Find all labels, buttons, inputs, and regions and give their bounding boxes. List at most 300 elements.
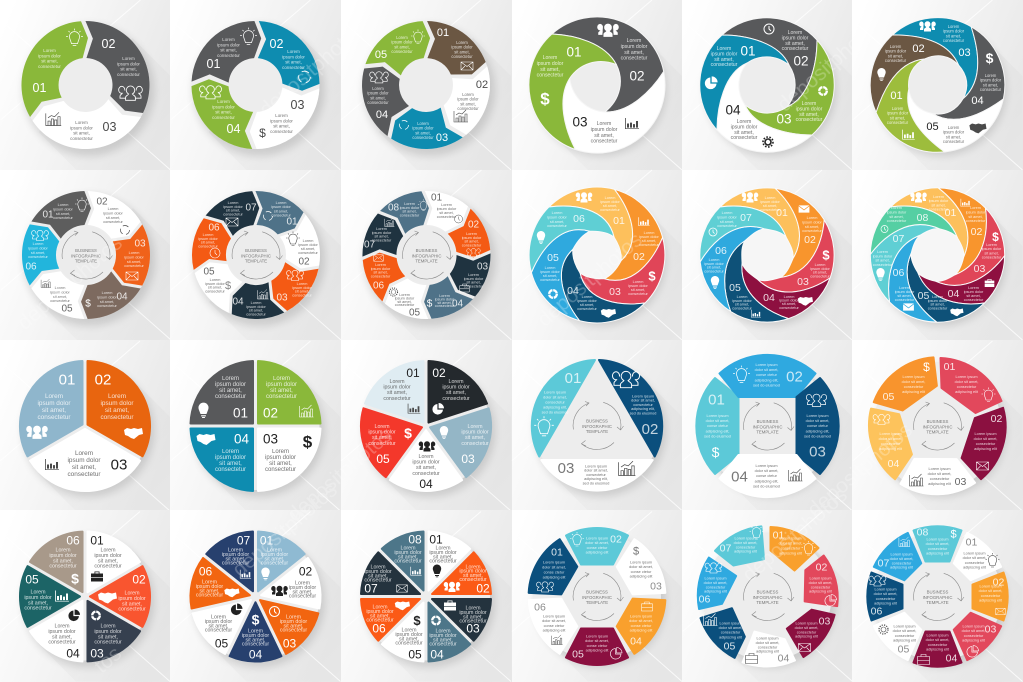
segment 04 (736, 231, 838, 330)
segment 04: consectetur (367, 100, 389, 105)
segment 01: 01 (740, 44, 756, 58)
segment 03 (258, 428, 320, 491)
segment 03: Lorem (815, 263, 825, 267)
segment 05: 05 (203, 266, 215, 278)
segment 04: ipsum dolor (429, 633, 457, 639)
segment 05: dolor sit amet, (893, 629, 916, 633)
segment 06: 06 (534, 602, 546, 614)
segment 01: consectetur (437, 215, 457, 219)
segment 05: Lorem (948, 124, 960, 130)
segment 02: Lorem ipsum (586, 536, 608, 540)
segment 04: 04 (948, 288, 959, 300)
segment 03 (101, 224, 169, 294)
segment 01: 01 (431, 192, 442, 204)
segment 04: sit amet, (433, 637, 453, 643)
segment 05: sit amet, (735, 303, 749, 307)
segment 03: ipsum dolor (124, 255, 145, 259)
segment 03: 03 (466, 622, 480, 636)
segment 04: dolor sit amet, (879, 437, 902, 441)
segment 07: sit amet, (368, 573, 388, 579)
segment 03 (26, 413, 140, 515)
segment 01: 01 (890, 90, 903, 102)
segment 01: sed do eiusmod (704, 434, 731, 438)
segment 05: dolor sit amet, (585, 639, 609, 643)
segment 01: consectetur (94, 564, 122, 570)
segment 03: consectetur (930, 477, 950, 481)
panel: 5-step arrow ring (340, 9, 506, 172)
segment 05: 05 (547, 252, 559, 264)
segment 05 (520, 221, 626, 331)
segment 02: ipsum dolor (885, 48, 907, 53)
segment 06: ipsum dolor (547, 215, 568, 219)
segment 02: sit amet, (888, 53, 903, 58)
segment 06: 06 (871, 606, 882, 618)
segment 02 (568, 179, 674, 289)
segment 08: sit amet, (398, 554, 418, 560)
center title with arrows (573, 402, 624, 450)
segment 06: Lorem ipsum (705, 576, 726, 580)
segment 04: 04 (731, 468, 748, 486)
segment 05: 05 (408, 648, 422, 662)
segment 01: 01 (944, 361, 955, 373)
segment 04: 04 (227, 122, 240, 136)
segment 03: sit amet, (269, 461, 292, 467)
segment 01: sit amet, (714, 57, 734, 63)
segment 01: ipsum dolor (53, 207, 74, 211)
segment 07 (206, 518, 282, 591)
segment 06: Lorem (55, 548, 71, 554)
segment 02: ipsum dolor (117, 61, 140, 66)
segment 04 (190, 428, 253, 491)
segment 02: sit amet, (120, 66, 137, 71)
center title with arrows: BUSINESS (586, 418, 608, 423)
segment 06 (349, 569, 420, 641)
segment 07: sit amet, (225, 556, 246, 562)
segment 08: adipiscing elit (926, 552, 950, 556)
segment 02 (436, 66, 506, 139)
segment 02: Lorem (627, 38, 641, 44)
segment 01: 01 (565, 370, 581, 387)
segment 03: adipiscing elit, (806, 429, 829, 433)
segment 05: Lorem (396, 34, 408, 40)
segment 06: 06 (372, 622, 386, 636)
panel: 3-step arrow ring (0, 15, 150, 172)
segment 04: sit amet, (437, 301, 452, 305)
segment 01: consectetur (929, 208, 949, 212)
segment 02: ipsum dolor (118, 596, 146, 602)
segment 03: sit amet, (98, 634, 118, 640)
segment 03: ipsum dolor (628, 284, 649, 288)
center title with arrows: INFOGRAPHIC (753, 424, 782, 429)
segment 02: ipsum dolor (298, 243, 319, 247)
segment 05: $ (225, 280, 231, 292)
segment 04: dolor sit amet, (629, 619, 653, 623)
segment 01: Lorem ipsum (956, 375, 977, 379)
segment 03: consectetur (982, 256, 1002, 260)
segment 02: adipiscing elit, (755, 378, 778, 382)
segment 08: 08 (408, 532, 422, 546)
segment 06 (867, 572, 902, 620)
segment 03: ipsum dolor (810, 267, 831, 271)
segment 04: ipsum dolor (215, 455, 246, 461)
segment 08: 08 (917, 526, 928, 538)
segment 03: ipsum dolor (464, 277, 484, 281)
segment 07: consectetur (372, 238, 392, 242)
segment 07: consectetur (892, 561, 912, 565)
segment 04: sed do eiusmod (753, 484, 780, 488)
segment 03 (574, 211, 680, 320)
segment 02 (88, 191, 141, 239)
segment 04: ipsum dolor (731, 124, 758, 130)
segment 01 (31, 176, 99, 245)
segment 04: 04 (725, 102, 741, 118)
segment 03: ipsum dolor (292, 286, 313, 290)
segment 03: sit amet, (984, 251, 999, 255)
segment 07 (870, 225, 940, 302)
segment 05: ipsum dolor (732, 299, 753, 303)
segment 06: dolor sit amet, (542, 619, 566, 623)
segment 03: 03 (558, 460, 574, 477)
segment 01: 01 (406, 366, 420, 380)
segment 01: ipsum dolor (760, 200, 781, 204)
segment 04: $ (252, 612, 260, 628)
segment 04: Lorem (102, 291, 112, 295)
segment 01: sit amet, (220, 47, 237, 52)
segment 01 (0, 15, 110, 117)
center title with arrows (62, 231, 113, 279)
segment 05 (31, 271, 84, 319)
segment 02: 02 (476, 79, 488, 91)
segment 06 (351, 242, 410, 301)
segment 03: ipsum dolor (265, 455, 296, 461)
segment 07: Lorem (228, 548, 244, 554)
segment 02: Lorem (124, 590, 140, 596)
panel: 5-slice pie (338, 348, 507, 514)
segment 08: ipsum dolor (400, 206, 420, 210)
segment 07: ipsum dolor (364, 569, 392, 575)
segment 05: adipiscing elit (719, 635, 743, 639)
watermark text: depositphotos (803, 418, 917, 522)
segment 03: $ (259, 126, 266, 140)
panel: 7-part ring (688, 513, 854, 681)
segment 06: 06 (25, 262, 37, 272)
center title with arrows (914, 572, 964, 621)
center title with arrows: BUSINESS (586, 589, 608, 594)
segment 04 (30, 601, 82, 662)
segment 02: 02 (263, 406, 278, 420)
center title with arrows (744, 402, 794, 450)
segment 06: Lorem (709, 258, 719, 262)
segment 01: ipsum dolor (215, 382, 246, 388)
segment 03: 03 (276, 292, 288, 304)
segment 07: 07 (740, 212, 752, 224)
segment 01: consectetur (217, 52, 240, 57)
center title with arrows (914, 402, 964, 450)
segment 04: Lorem (248, 628, 264, 634)
segment 04: consectetur (577, 307, 598, 311)
segment 07: dolor sit amet, (890, 557, 913, 561)
segment 05: Lorem (374, 424, 390, 430)
segment 04: Lorem (251, 301, 261, 305)
segment 01: $ (712, 444, 720, 460)
segment 05: 05 (572, 648, 584, 660)
segment 02: 02 (476, 582, 490, 596)
segment 02: consectetur (457, 106, 479, 111)
segment 05: adipiscing elit (893, 639, 917, 643)
segment 05: consectetur (721, 631, 741, 635)
segment 01: dolor sit amet, (706, 419, 729, 423)
panel: 6-step ring with center (3, 176, 169, 334)
segment 04: ipsum dolor (97, 295, 118, 299)
segment 04 (717, 63, 812, 152)
segment 02: ipsum dolor (459, 569, 487, 575)
center hole (567, 225, 627, 285)
segment 08: consectetur (394, 559, 422, 565)
segment 02: Lorem (448, 379, 464, 385)
segment 01: sit amet, (454, 49, 470, 54)
watermark text: depositphotos (773, 13, 887, 117)
segment 02: 02 (816, 562, 827, 574)
segment 04: sit amet, (782, 302, 796, 306)
segment 01: ipsum dolor (271, 205, 292, 209)
segment 03: $ (992, 230, 999, 244)
segment 02: consectetur (289, 594, 316, 600)
segment 01: Lorem (933, 195, 944, 199)
segment 05: Lorem ipsum (903, 375, 924, 379)
center title with arrows: BUSINESS (416, 248, 437, 252)
segment 04: sit amet, (370, 95, 386, 100)
segment 05: sit amet, (53, 295, 67, 299)
segment 03: ipsum dolor (70, 125, 93, 130)
segment 08 (857, 186, 960, 290)
segment 01: Lorem (222, 36, 235, 42)
segment 03 (745, 40, 834, 135)
segment 05 (709, 238, 811, 336)
segment 08: dolor sit amet, (926, 542, 949, 546)
segment 01: Lorem (389, 379, 405, 385)
segment 03: sed do eiusmod (804, 434, 831, 438)
segment 01 (427, 20, 486, 75)
segment 08: ipsum dolor (887, 210, 907, 214)
segment 01: sit amet, (931, 203, 946, 207)
segment 02: consectetur (885, 58, 907, 63)
segment 03: sit amet, (72, 464, 96, 470)
panel: 4-step swirl (700, 18, 834, 152)
segment 01: 01 (551, 546, 563, 558)
segment 04 (414, 271, 473, 331)
segment 06 (30, 516, 109, 592)
segment 05: ipsum dolor (928, 299, 948, 303)
segment 03 (250, 600, 318, 659)
segment 03: Lorem ipsum (929, 467, 950, 471)
segment 02: dolor sit amet, (631, 399, 655, 403)
segment 02: Lorem (122, 56, 135, 60)
segment 02 (566, 528, 628, 564)
segment 02: consectetur (117, 71, 140, 76)
segment 05: sit amet, (28, 600, 48, 606)
segment 06: sit amet, (201, 241, 215, 245)
segment 04: Lorem (418, 454, 434, 460)
segment 02: conse ctetur (756, 373, 778, 377)
segment 03: consectetur (67, 470, 101, 478)
segment 07: consectetur (364, 578, 392, 584)
segment 02: Lorem ipsum (632, 394, 654, 398)
segment 04: dolor sit amet, (926, 638, 949, 642)
segment 07: Lorem (376, 227, 387, 231)
segment 04 (914, 632, 962, 667)
panel: 6-part ring (522, 528, 672, 665)
segment 04 (846, 399, 927, 479)
segment 02: sit amet, (285, 59, 302, 64)
segment 04: 04 (888, 458, 899, 470)
segment 04: Lorem ipsum (630, 614, 652, 618)
segment 06: dolor sit amet, (874, 592, 897, 596)
segment 05 (874, 344, 945, 419)
segment 01 (508, 354, 623, 457)
segment 03: consectetur (943, 38, 965, 43)
segment 02: Lorem ipsum (810, 576, 831, 580)
segment 07: consectetur (223, 212, 244, 216)
watermark text: depositphotos (533, 228, 647, 332)
segment 03: sit amet, (73, 130, 90, 135)
segment 04: $ (85, 298, 91, 310)
segment 01: Lorem ipsum (964, 552, 985, 556)
segment 04: ipsum dolor (242, 633, 269, 639)
segment 02: 02 (298, 256, 310, 268)
segment 01: dolor sit amet, (542, 566, 566, 570)
segment 03: consectetur (280, 628, 307, 634)
segment 01: consectetur (711, 62, 738, 68)
segment 02 (90, 566, 169, 642)
segment 05: 05 (376, 452, 390, 466)
segment 01: consectetur (451, 54, 473, 59)
segment 02: Lorem (788, 30, 802, 36)
segment 01 (696, 378, 738, 474)
segment 01: consectetur (760, 208, 781, 212)
segment 03: sed do eiusmod (583, 481, 609, 485)
segment 01: ipsum dolor (929, 199, 949, 203)
segment 06: 06 (573, 213, 585, 225)
segment 07: Lorem (722, 211, 732, 215)
segment 04: consectetur (429, 642, 457, 648)
segment 04 (561, 249, 645, 323)
segment 03: 03 (776, 112, 792, 126)
segment 03 (935, 208, 1005, 285)
segment 03: consectetur (292, 293, 313, 297)
segment 07: Lorem ipsum (735, 536, 756, 540)
segment 02: Lorem (970, 206, 981, 210)
segment 06 (868, 232, 972, 336)
segment 03: adipiscing elit (795, 635, 819, 639)
segment 05: 05 (215, 636, 228, 650)
segment 05: ipsum dolor (395, 632, 423, 638)
segment 03 (945, 604, 1004, 663)
segment 06: ipsum dolor (198, 237, 219, 241)
segment 01: Lorem (45, 392, 63, 400)
segment 04: Lorem (439, 294, 450, 298)
segment 01: consectetur (38, 63, 61, 68)
segment 04 (190, 79, 254, 149)
segment 02: adipiscing elit, (631, 407, 655, 411)
segment 01: dolor sit amet, (963, 556, 986, 560)
segment 02: dolor sit amet, (809, 581, 832, 585)
segment 02: consectetur (266, 394, 297, 400)
segment 01 (425, 189, 469, 233)
segment 06: 06 (373, 280, 384, 292)
segment 05 (907, 253, 984, 322)
segment 01: consectetur (261, 561, 288, 567)
segment 04: sit amet, (100, 300, 114, 304)
watermark text: tos (90, 642, 126, 678)
segment 04 (915, 220, 1018, 324)
segment 02: ipsum dolor (282, 54, 305, 59)
segment 04 (733, 621, 795, 681)
segment 05: sit amet, (930, 303, 945, 307)
segment 06: Lorem (203, 233, 213, 237)
segment 07: Lorem (370, 564, 386, 570)
segment 04: consectetur (48, 640, 76, 646)
segment 06: consectetur (895, 298, 915, 302)
segment 01: consectetur (600, 208, 621, 212)
segment 04: sit amet, (966, 294, 981, 298)
segment 05: ipsum dolor (943, 129, 965, 134)
segment 03: 03 (958, 47, 971, 59)
segment 04: sit amet, (215, 109, 232, 114)
segment 01: Lorem (441, 203, 452, 207)
segment 03: 03 (283, 636, 296, 650)
center disc (228, 226, 284, 284)
segment 07: adipiscing elit (734, 550, 758, 554)
watermark text: depositphotos (255, 18, 369, 122)
segment 03 (756, 208, 843, 302)
segment 01 (700, 35, 789, 130)
segment 03: ipsum dolor (943, 28, 965, 33)
segment 02: adipiscing elit (974, 447, 998, 451)
segment 03: consectetur (797, 630, 817, 634)
segment 04: Lorem (582, 295, 592, 299)
segment 06: consectetur (706, 585, 726, 589)
segment 03 (29, 73, 141, 172)
center title with arrows: TEMPLATE (415, 258, 438, 263)
segment 01: Lorem (892, 106, 904, 110)
segment 06: consectetur (49, 564, 77, 570)
segment 01: 01 (437, 27, 449, 39)
segment 03: ipsum dolor (94, 629, 122, 635)
segment 01: adipiscing elit (543, 576, 566, 580)
segment 05: ipsum dolor (205, 619, 232, 625)
segment 01: consectetur (965, 561, 985, 565)
segment 02: ipsum dolor (802, 220, 823, 224)
segment 03: sit amet, (415, 130, 431, 135)
center title with arrows: TEMPLATE (245, 258, 267, 263)
segment 05: consectetur (540, 278, 561, 282)
segment 03: 03 (477, 262, 488, 272)
segment 04: ipsum dolor (779, 299, 800, 303)
segment 02: 02 (299, 564, 312, 578)
segment 02: Lorem (462, 92, 474, 96)
segment 06 (688, 553, 741, 609)
segment 02 (903, 174, 1007, 278)
segment 06: adipiscing elit (874, 602, 898, 606)
segment 02: sit amet, (106, 216, 120, 220)
segment 06: 06 (208, 222, 220, 234)
segment 03: $ (633, 546, 639, 558)
segment 02: consectetur (442, 396, 470, 402)
segment 05: consectetur (732, 306, 753, 310)
segment 02: consectetur (639, 243, 660, 247)
center title with arrows: INFOGRAPHIC (582, 594, 612, 599)
segment 04: dolor sit amet, (756, 641, 779, 645)
